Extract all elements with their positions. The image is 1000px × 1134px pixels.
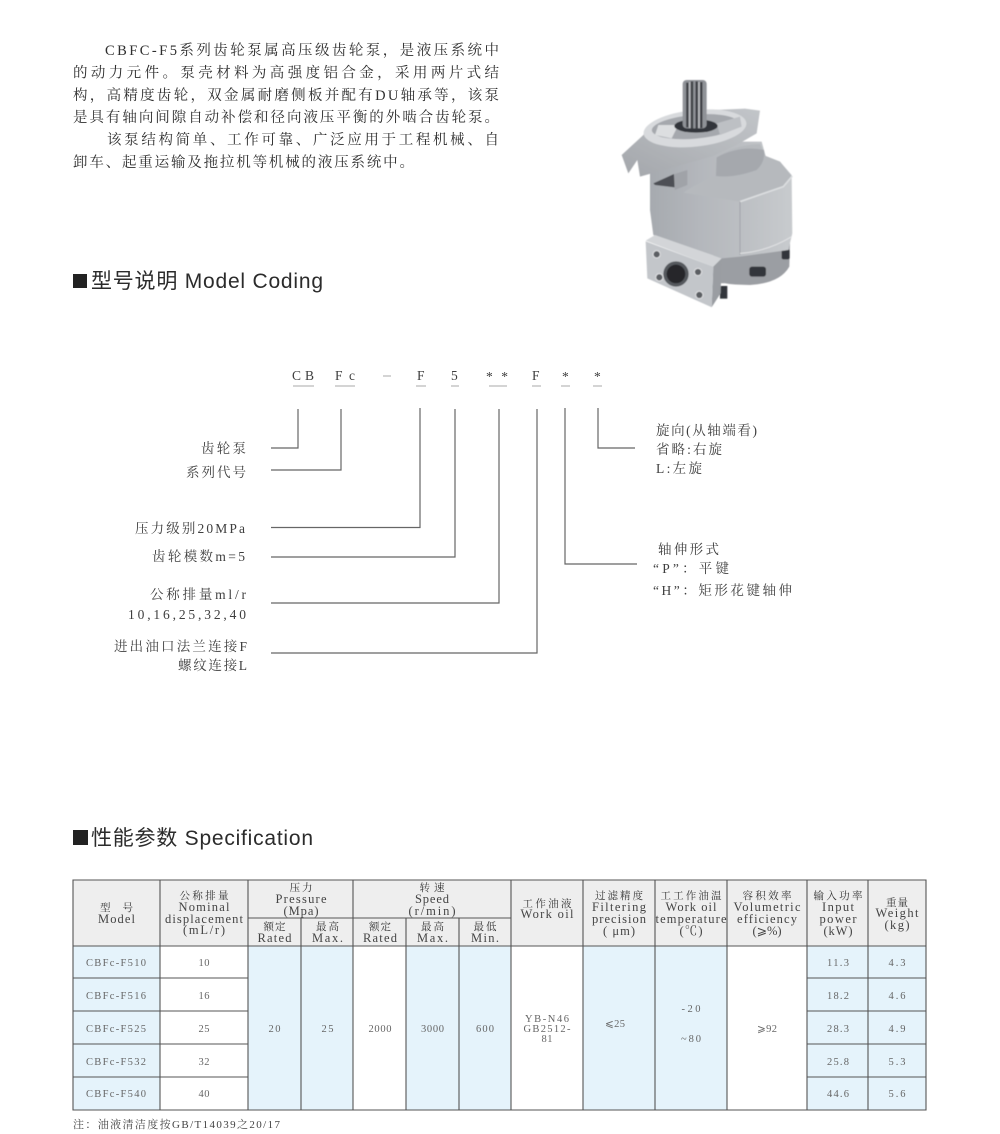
table body values: GB2512- xyxy=(524,1024,571,1035)
right coding labels: L:左旋 xyxy=(656,461,702,476)
table body values: 20 xyxy=(268,1024,280,1035)
left coding labels: 系列代号 xyxy=(186,465,246,480)
table body values: 600 xyxy=(476,1024,494,1035)
table body values: 25.8 xyxy=(827,1057,849,1068)
coding connector lines xyxy=(271,408,637,653)
intro text xyxy=(73,41,500,171)
intro text: 是具有轴向间隙自动补偿和径向液压平衡的外啮合齿轮泵。 xyxy=(73,108,499,126)
left coding labels: 齿轮泵 xyxy=(201,440,246,456)
table header text: Rated xyxy=(258,931,292,945)
left coding labels: 10,16,25,32,40 xyxy=(128,607,246,622)
left coding labels: 螺纹连接L xyxy=(178,657,247,673)
intro text: CBFC-F5系列齿轮泵属高压级齿轮泵，是液压系统中 xyxy=(105,41,499,59)
intro text: 的动力元件。泵壳材料为高强度铝合金，采用两片式结 xyxy=(73,64,500,82)
table header text: 重量 xyxy=(886,896,908,909)
table body values: 40 xyxy=(198,1089,210,1100)
flange xyxy=(622,109,760,177)
pump port block xyxy=(646,235,722,307)
model code letters: * xyxy=(594,369,601,384)
right coding labels: “P”：平键 xyxy=(653,560,730,576)
right coding labels xyxy=(653,422,792,598)
table header text: (kg) xyxy=(884,918,910,932)
model code letters: CB xyxy=(292,368,314,383)
table header text: precision xyxy=(592,912,647,926)
model code letters: * xyxy=(562,369,569,384)
table header text: (℃) xyxy=(680,924,702,938)
table header text: Max. xyxy=(312,931,343,945)
table header text: Min. xyxy=(471,931,499,945)
table header text xyxy=(98,881,919,945)
specification table xyxy=(73,880,926,1110)
right coding labels: 轴伸形式 xyxy=(658,541,719,557)
table header text: Pressure xyxy=(276,892,327,906)
table header text: Rated xyxy=(363,931,398,945)
table header text: (⩾%) xyxy=(752,924,782,938)
table header text: Nominal xyxy=(178,900,230,914)
table header text: 压力 xyxy=(290,881,312,894)
table header text: Work oil xyxy=(520,907,574,921)
table body values: 4.3 xyxy=(888,958,906,969)
table body values: CBFc-F510 xyxy=(86,958,146,969)
table body values: 11.3 xyxy=(827,958,849,969)
table header text: Filtering xyxy=(592,900,647,914)
table body values: 5.6 xyxy=(888,1089,906,1100)
table body values: ⩾92 xyxy=(757,1024,777,1035)
table body values: 5.3 xyxy=(888,1057,906,1068)
table header text: efficiency xyxy=(737,912,798,926)
table header text: 工工作油温 xyxy=(660,889,722,902)
model code letters xyxy=(292,368,602,386)
table body values: CBFc-F516 xyxy=(86,991,146,1002)
table body values: YB-N46 xyxy=(525,1014,569,1025)
table body values: 4.9 xyxy=(888,1024,906,1035)
table header text: 过滤精度 xyxy=(595,889,644,902)
model code letters: Fc xyxy=(335,368,355,383)
model code letters: F xyxy=(417,368,425,383)
intro text: 构，高精度齿轮，双金属耐磨侧板并配有DU轴承等，该泵 xyxy=(73,86,499,104)
pump shaft xyxy=(683,80,707,129)
table body values: 81 xyxy=(542,1034,552,1045)
pump shoulder xyxy=(683,144,792,202)
heading: specification: 性能参数 Specification xyxy=(91,827,313,850)
table body values: -20 xyxy=(682,1004,700,1015)
intro text: 该泵结构简单、工作可靠、广泛应用于工程机械、自 xyxy=(107,130,499,148)
table footnote: 注：油液清洁度按GB/T14039之20/17 xyxy=(73,1117,280,1131)
table body values: 25 xyxy=(198,1024,210,1035)
table header text: Input xyxy=(822,900,855,914)
left coding labels xyxy=(114,440,247,673)
table header text: Speed xyxy=(415,892,450,906)
table header text: 额定 xyxy=(264,920,286,933)
table header text: Weight xyxy=(876,906,919,920)
table body values: 10 xyxy=(198,958,210,969)
pump rear cover xyxy=(713,243,790,285)
table body values: 16 xyxy=(198,991,210,1002)
intro text: 卸车、起重运输及拖拉机等机械的液压系统中。 xyxy=(73,153,414,171)
table body values: 25 xyxy=(322,1024,334,1035)
table body values: 44.6 xyxy=(827,1089,849,1100)
table header text: 工作油液 xyxy=(522,897,572,910)
left coding labels: 压力级别20MPa xyxy=(135,520,245,536)
table header text: ( μm) xyxy=(603,924,635,938)
flange top rim xyxy=(642,105,748,152)
table header text: (kW) xyxy=(824,924,852,938)
table body values: CBFc-F540 xyxy=(86,1089,146,1100)
pump bolts xyxy=(720,249,790,299)
table body values: CBFc-F532 xyxy=(86,1057,146,1068)
right coding labels: “H”：矩形花键轴伸 xyxy=(653,582,792,598)
icon: gear pump photo xyxy=(622,80,792,307)
table body values: 4.6 xyxy=(888,991,906,1002)
model code letters: 5 xyxy=(451,368,458,383)
table header text: 额定 xyxy=(369,920,392,933)
table header text: Model xyxy=(98,912,136,926)
left coding labels: 进出油口法兰连接F xyxy=(114,638,247,654)
table header text: 公称排量 xyxy=(180,889,228,902)
table header text: 转速 xyxy=(420,881,445,894)
table body values: 2000 xyxy=(368,1024,392,1035)
right coding labels: 旋向(从轴端看) xyxy=(656,422,757,438)
flange underside slot xyxy=(653,174,675,187)
right coding labels: 省略:右旋 xyxy=(656,441,722,457)
table header text: 最高 xyxy=(316,920,339,933)
left coding labels: 公称排量ml/r xyxy=(150,586,246,602)
pump main body xyxy=(650,142,792,258)
table header text: 最低 xyxy=(474,921,497,933)
table body values: ⩽25 xyxy=(605,1019,625,1030)
table header text: Work oil xyxy=(666,900,717,914)
table body values: CBFc-F525 xyxy=(86,1024,146,1035)
heading: model coding: 型号说明 Model Coding xyxy=(91,270,323,293)
model code letters: ** xyxy=(486,369,508,384)
table header text: 输入功率 xyxy=(814,889,863,902)
table body values xyxy=(86,958,906,1100)
table body values: 18.2 xyxy=(827,991,849,1002)
model code letters: F xyxy=(532,368,540,383)
table header text: (Mpa) xyxy=(284,904,318,918)
table body values: ~80 xyxy=(681,1034,701,1045)
pump dome xyxy=(716,149,764,176)
table header text: 型 号 xyxy=(100,901,134,914)
table header text: 容积效率 xyxy=(742,889,792,902)
table header text: (mL/r) xyxy=(183,923,225,937)
table header text: (r/min) xyxy=(408,904,456,918)
table backgrounds xyxy=(73,880,926,1110)
table header text: power xyxy=(820,912,857,926)
table header text: temperature xyxy=(656,912,727,926)
table header text: displacement xyxy=(165,912,244,926)
left coding labels: 齿轮模数m=5 xyxy=(152,548,245,564)
table header text: 最高 xyxy=(421,920,444,933)
table body values: 28.3 xyxy=(827,1024,849,1035)
table body values: 3000 xyxy=(421,1024,444,1035)
table header text: Volumetric xyxy=(734,900,801,914)
table header text: Max. xyxy=(417,931,448,945)
table body values: 32 xyxy=(198,1057,210,1068)
